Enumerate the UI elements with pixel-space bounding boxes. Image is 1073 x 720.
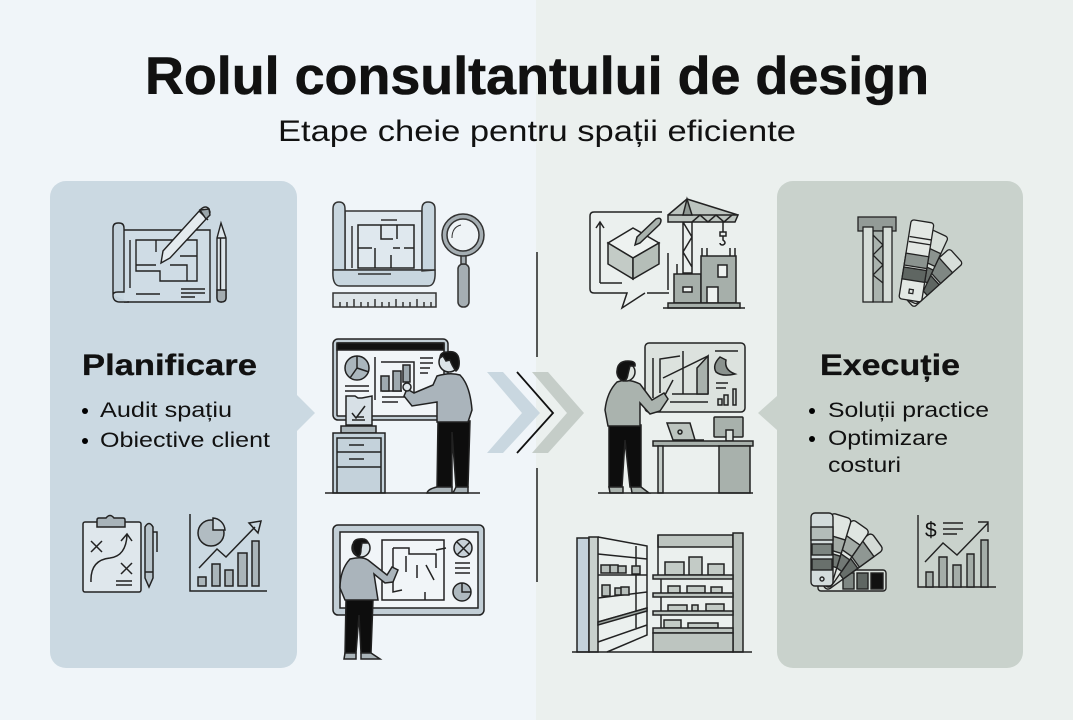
divider: upper line <box>536 252 538 357</box>
icon: blueprint with magnifier and ruler <box>333 202 484 307</box>
icon: cost chart <box>918 515 996 587</box>
list: Execuție bullets <box>809 399 989 477</box>
panel: Execuție <box>758 181 1023 668</box>
icon: column and swatches <box>858 217 963 308</box>
list: Execuție bullets: Soluții practice <box>828 399 989 422</box>
divider: lower line <box>536 468 538 582</box>
illustration: presenter at board and desk <box>598 343 753 493</box>
list: Execuție bullets: costuri <box>828 454 901 477</box>
list: Execuție bullets: Optimizare <box>828 427 948 450</box>
title: Rolul consultantului de design <box>145 47 929 106</box>
icon: growth chart with pie <box>190 514 267 591</box>
subtitle: Etape cheie pentru spații eficiente <box>278 115 796 148</box>
list: Planificare bullets: Obiective client <box>100 429 270 452</box>
icon: blueprint and pencils <box>113 207 226 302</box>
illustration: 3D model and crane <box>590 199 745 308</box>
illustration: shelving units <box>572 533 752 652</box>
panel: Planificare <box>50 181 315 668</box>
list: Planificare bullets: Audit spațiu <box>100 399 232 422</box>
illustration: presenter at monitor with cabinet <box>325 339 480 493</box>
illustration: presenter at floor plan screen <box>333 525 484 659</box>
icon: cost chart: $ <box>925 519 937 542</box>
icon: colour fan <box>811 513 886 591</box>
heading: Execuție: Execuție <box>820 349 960 382</box>
icon: strategy clipboard and pen <box>83 516 157 592</box>
arrow: process chevrons <box>487 372 584 453</box>
list: Planificare bullets <box>82 399 270 452</box>
heading: Planificare: Planificare <box>82 349 257 382</box>
